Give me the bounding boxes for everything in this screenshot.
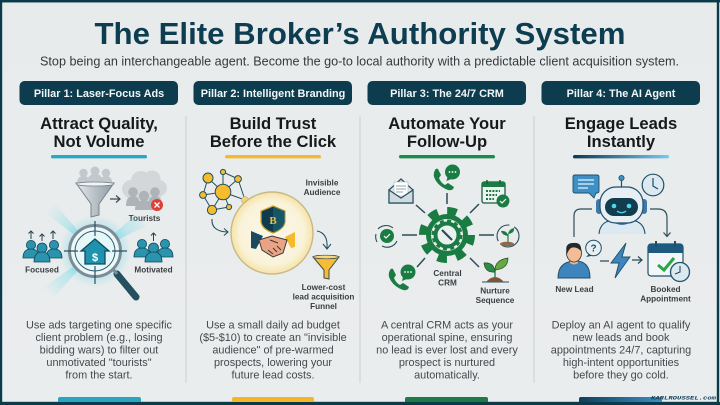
pillar 4 heading: Engage Leads: [565, 114, 677, 133]
icon: focused group: [23, 231, 62, 262]
label: booked appointment: Appointment: [640, 294, 691, 304]
icon: check cycle: [376, 226, 397, 247]
pillar 3 tab: [405, 397, 488, 402]
icon: phone with chat bottom: [389, 264, 416, 290]
title: The Elite Broker’s Authority System: [94, 16, 626, 51]
icon: gold funnel: [313, 255, 339, 279]
label: lower-cost funnel: [293, 283, 354, 311]
pillar 2 badge: Pillar 2: Intelligent Branding: [201, 88, 345, 100]
icon: motivated group: [134, 233, 173, 262]
pillar 2 tab: [232, 397, 314, 402]
label: lower-cost funnel: Lower-cost: [302, 283, 346, 292]
pillar 1 description: client problem (e.g., losing: [35, 332, 163, 344]
pillar 1 heading: Not Volume: [54, 132, 144, 151]
pillar 4 heading: Instantly: [587, 132, 656, 151]
pillar 1 badge: [20, 81, 178, 105]
pillar 2 description: audience" of pre-warmed: [212, 344, 334, 356]
pillar 3 description: [376, 320, 518, 382]
pillar 3 heading: Follow-Up: [407, 132, 487, 151]
pillar 2 description: [199, 320, 347, 382]
icon: sprout cycle: [497, 225, 519, 247]
icon: phone with chat top: [434, 164, 460, 190]
label: booked appointment: [640, 285, 691, 304]
icon: AI robot: [596, 175, 647, 234]
pillar 1 description: unmotivated "tourists": [46, 357, 152, 369]
pillar 3 badge: [368, 81, 526, 105]
pillar 4 description: high-intent opportunities: [563, 357, 680, 369]
icon: chat bubble: [573, 175, 599, 198]
icon: magnifier targeting house: [40, 200, 146, 302]
panel: pillar 1: [20, 81, 178, 402]
pillar 1 badge: Pillar 1: Laser-Focus Ads: [34, 88, 164, 100]
pillar 4 description: Deploy an AI agent to qualify: [552, 320, 691, 332]
panel: pillar 4: [542, 81, 700, 402]
icon: funnel filtering tourists: [76, 166, 167, 217]
icon: calendar with check: [482, 180, 510, 208]
pillar 1 heading: [40, 114, 158, 158]
pillar 4 description: new leads and book: [573, 332, 670, 344]
pillar 1 description: bidding wars) to filter out: [40, 344, 158, 356]
pillar 3 heading: [388, 114, 506, 158]
pillar 2 description: ($5-$10) to create an "invisible: [199, 332, 347, 344]
arrow: robot to calendar: [650, 209, 670, 236]
label: booked appointment: Booked: [650, 285, 681, 294]
icon: question bubble: [586, 240, 601, 257]
label: nurture sequence: Nurture: [480, 286, 510, 296]
pillar 3 description: operational spine, ensuring: [382, 332, 512, 344]
pillar 2 heading: Build Trust: [230, 114, 317, 133]
icon: brand trust bubble: B: [269, 215, 277, 227]
pillar 2 heading: [210, 114, 337, 158]
pillar 4 description: before they go cold.: [573, 370, 669, 382]
pillar 1 heading: Attract Quality,: [40, 114, 158, 133]
pillar 2 description: Use a small daily ad budget: [206, 320, 340, 332]
pillar 4 description: [551, 320, 691, 382]
pillar 3 heading: Automate Your: [388, 114, 506, 133]
icon: booked calendar: [648, 241, 690, 282]
pillar 4 badge: Pillar 4: The AI Agent: [567, 88, 676, 100]
label: nurture sequence: Sequence: [476, 296, 515, 305]
connector spokes: [402, 193, 494, 267]
icon: email envelope: [389, 179, 413, 203]
icon: lightning bolt: [600, 243, 642, 278]
label: invisible audience: Audience: [304, 188, 341, 197]
label: central CRM: CRM: [438, 278, 457, 288]
icon: audience network: [200, 169, 245, 215]
icon: brand trust bubble: [231, 192, 313, 274]
label: new lead: New Lead: [555, 285, 594, 294]
icon: nurture plant: [482, 258, 509, 282]
pillar 4 description: appointments 24/7, capturing: [551, 344, 691, 356]
label: lower-cost funnel: Funnel: [310, 302, 337, 311]
pillar 4 badge: [542, 81, 700, 105]
label: tourists: Tourists: [129, 214, 161, 223]
label: motivated: Motivated: [134, 266, 173, 274]
icon: magnifier targeting house: $: [92, 252, 98, 264]
label: invisible audience: [304, 178, 341, 197]
panel: pillar 2: [194, 81, 354, 402]
pillar 2 heading: Before the Click: [210, 132, 337, 151]
pillar 1 description: [26, 320, 172, 382]
label: invisible audience: Invisible: [306, 178, 339, 188]
icon: central CRM gear: [423, 211, 471, 259]
label: focused: Focused: [25, 266, 59, 274]
pillar 1 description: from the start.: [65, 370, 133, 382]
pillar 3 description: no lead is ever lost and every: [376, 344, 518, 356]
subtitle: Stop being an interchangeable agent. Become the go-to local authority with a predictable client acquisition system.: [40, 54, 679, 68]
icon: question bubble: ?: [590, 244, 597, 254]
arrow: into bubble: [212, 219, 228, 236]
label: central CRM: Central: [433, 269, 462, 278]
arrow: lead to robot: [574, 209, 592, 237]
pillar 3 description: automatically.: [414, 370, 480, 382]
pillar 3 description: A central CRM acts as your: [381, 320, 513, 332]
label: central CRM: [433, 269, 462, 288]
pillar 2 badge: [194, 81, 352, 105]
pillar 2 description: prospects, lowering your: [214, 357, 332, 369]
pillar 3 badge: Pillar 3: The 24/7 CRM: [390, 88, 504, 100]
arrow: to funnel: [317, 231, 331, 249]
icon: new lead person: [558, 243, 590, 278]
label: nurture sequence: [476, 286, 515, 305]
icon: clock: [642, 174, 664, 196]
pillar 3 description: prospect is nurtured: [399, 357, 495, 369]
watermark: KARLROUSSEL.com: [651, 394, 717, 402]
panel: pillar 3: [368, 81, 526, 402]
label: lower-cost funnel: lead acquisition: [293, 292, 354, 302]
pillar 1 description: Use ads targeting one specific: [26, 320, 172, 332]
pillar 1 tab: [58, 397, 141, 402]
pillar 4 heading: [565, 114, 677, 158]
pillar 4 tab: [579, 397, 662, 402]
pillar 2 description: future lead costs.: [232, 370, 314, 382]
